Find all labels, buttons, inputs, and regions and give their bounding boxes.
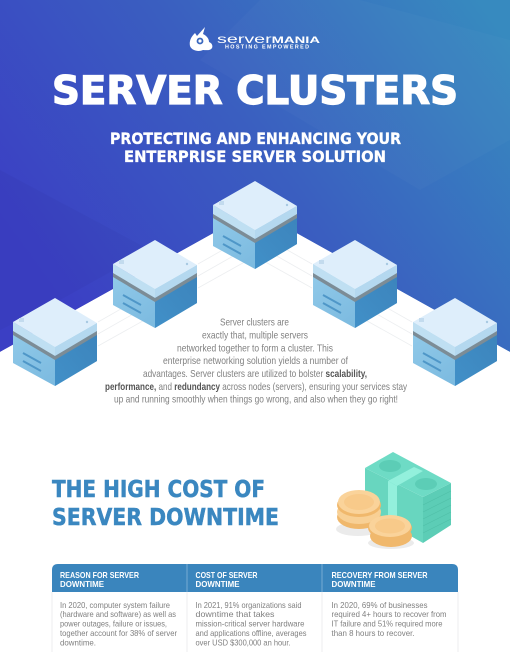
column 2 text: downtime that takes <box>196 609 274 619</box>
column 3 heading: DOWNTIME <box>332 579 376 589</box>
column 1 heading <box>60 570 139 589</box>
column 3 heading: RECOVERY FROM SERVER <box>332 570 428 580</box>
column 2 heading: DOWNTIME <box>196 579 240 589</box>
column 3 heading <box>332 570 428 589</box>
column 1 text: In 2020, computer system failure <box>60 600 170 610</box>
server node 5 <box>413 298 497 386</box>
icon: money stack and coins <box>336 452 451 549</box>
logo: ServerMania <box>190 27 321 51</box>
subtitle: PROTECTING AND ENHANCING YOUR <box>110 129 401 148</box>
logo tagline: HOSTING EMPOWERED <box>225 44 309 50</box>
column 1 text: downtime. <box>60 638 96 648</box>
column 2 text: mission-critical server hardware <box>196 618 305 628</box>
section heading: the high cost of server downtime: SERVER DOWNTIME <box>52 503 279 531</box>
intro paragraph: exactly that, multiple servers <box>202 330 308 342</box>
column 2 text: and applications offline, averages <box>196 628 306 638</box>
column 3 text: than 8 hours to recover. <box>332 628 414 638</box>
subtitle <box>110 129 401 166</box>
table header <box>52 564 458 592</box>
column 1 heading: DOWNTIME <box>60 579 104 589</box>
column 2 text <box>196 600 306 648</box>
downtime table <box>52 564 458 652</box>
server node 3 (centre) <box>213 181 297 269</box>
column 3 text: required 4+ hours to recover from <box>332 609 447 619</box>
server cluster illustration <box>13 181 497 386</box>
logo wordmark: server MANIA <box>217 32 321 46</box>
column 1 text: together account for 38% of server <box>60 628 177 638</box>
title: SERVER CLUSTERS <box>52 69 458 114</box>
white diamond backdrop <box>0 210 510 652</box>
column 1 heading: REASON FOR SERVER <box>60 570 139 580</box>
server node 1 <box>13 298 97 386</box>
column 1 text <box>60 600 177 648</box>
intro paragraph: performance, and redundancy across nodes (servers), ensuring your services stay <box>105 382 408 393</box>
server node 2 <box>113 240 197 328</box>
column 2 heading: COST OF SERVER <box>196 570 258 580</box>
column 1 text: (hardware and software) as well as <box>60 609 176 619</box>
blue gradient banner <box>0 0 510 352</box>
icon: coin stack right <box>368 515 414 549</box>
connection lines between servers <box>98 243 412 346</box>
table body outline <box>52 592 458 652</box>
intro paragraph: up and running smoothly when things go wrong, and also when they go right! <box>114 394 398 406</box>
subtitle: ENTERPRISE SERVER SOLUTION <box>124 147 386 166</box>
section heading: the high cost of server downtime <box>52 475 279 531</box>
column 3 text <box>332 600 447 638</box>
column 1 text: power outages, failure or issues, <box>60 618 167 628</box>
server node 4 <box>313 240 397 328</box>
column 2 heading <box>196 570 258 589</box>
section heading: the high cost of server downtime: THE HIGH COST OF <box>52 475 265 503</box>
column 2 text: over USD $300,000 an hour. <box>196 638 290 648</box>
intro paragraph: advantages. Server clusters are utilized to bolster scalability, <box>143 369 367 380</box>
column 3 text: In 2020, 69% of businesses <box>332 600 428 610</box>
intro paragraph: enterprise networking solution yields a number of <box>163 356 348 367</box>
intro paragraph: networked together to form a cluster. This <box>177 344 333 354</box>
column 3 text: IT failure and 51% required more <box>332 618 443 628</box>
intro paragraph: Server clusters are <box>220 318 289 328</box>
icon: coin stack left <box>336 490 381 536</box>
column 2 text: In 2021, 91% organizations said <box>196 600 302 610</box>
icon: banknote stack <box>365 452 451 543</box>
icon: logo mark <box>190 27 212 51</box>
intro paragraph <box>105 318 408 406</box>
